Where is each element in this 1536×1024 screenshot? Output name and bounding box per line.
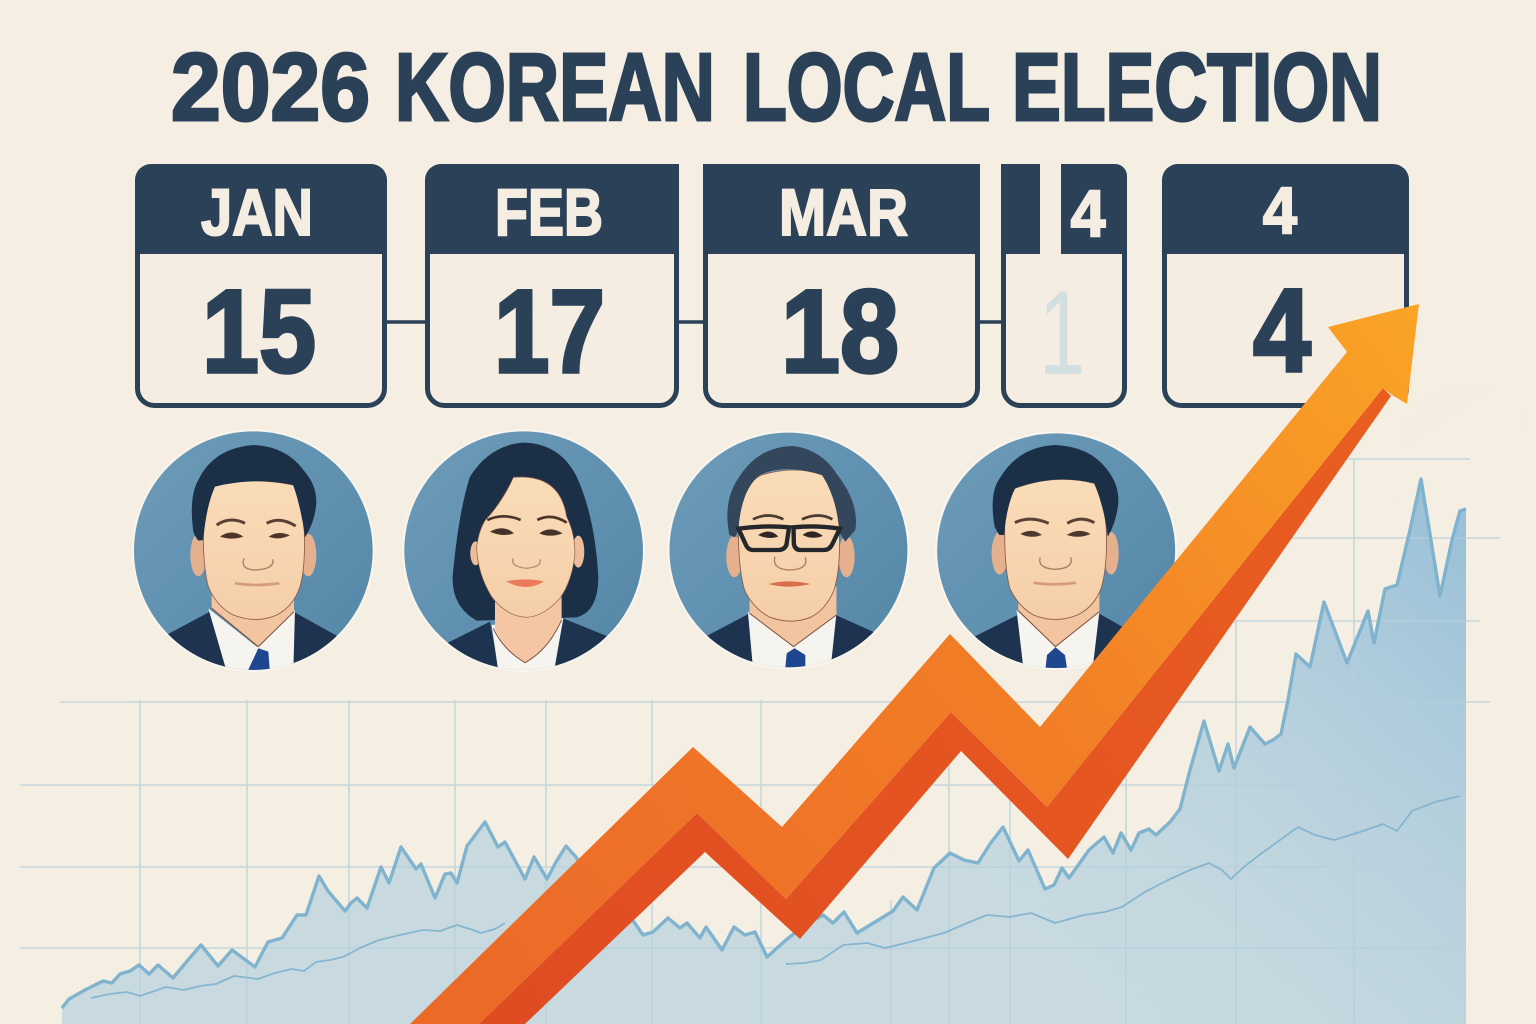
hidden card corner behind arrow — [1340, 396, 1416, 412]
arrow face and head — [410, 304, 1419, 1024]
title: KOREAN — [395, 34, 715, 141]
grid lines — [20, 459, 1500, 1024]
main series line — [62, 479, 1466, 1008]
rising arrow — [410, 304, 1419, 1024]
secondary series line, left part — [91, 923, 505, 998]
secondary series line, right part — [786, 796, 1460, 964]
arrow shadow band — [479, 388, 1391, 1024]
title: LOCAL — [743, 34, 990, 141]
portrait 4: man with navy suit — [935, 431, 1177, 673]
calendar: January 15: JAN — [201, 175, 313, 249]
area chart — [20, 459, 1500, 1024]
calendar: narrow broken card — [1001, 160, 1127, 406]
calendar: February 17 — [425, 164, 679, 406]
title — [171, 34, 1382, 141]
calendar: March 18: MAR — [779, 175, 908, 249]
portrait 2: woman with long dark hair — [402, 429, 645, 673]
calendar: March 18 — [703, 164, 980, 406]
calendar: narrow broken card: 4 — [1071, 177, 1106, 250]
calendar: April 4 — [1162, 164, 1416, 412]
calendar: narrow broken card: 1 — [1039, 265, 1085, 399]
connector lines between calendars — [385, 320, 1004, 324]
calendar: February 17: 17 — [494, 266, 605, 398]
title: 2026 — [171, 34, 370, 141]
calendar: January 15: 15 — [202, 266, 316, 398]
calendar: April 4: 4 — [1253, 264, 1311, 396]
calendar: January 15 — [135, 164, 387, 406]
portrait 1: man with navy suit — [132, 429, 375, 673]
calendar: April 4: 4 — [1263, 173, 1298, 247]
portrait 3: man with glasses — [667, 431, 909, 673]
calendar: February 17: FEB — [495, 175, 603, 249]
main area series — [62, 479, 1466, 1024]
calendar: March 18: 18 — [781, 266, 899, 398]
title: ELECTION — [1012, 34, 1382, 141]
